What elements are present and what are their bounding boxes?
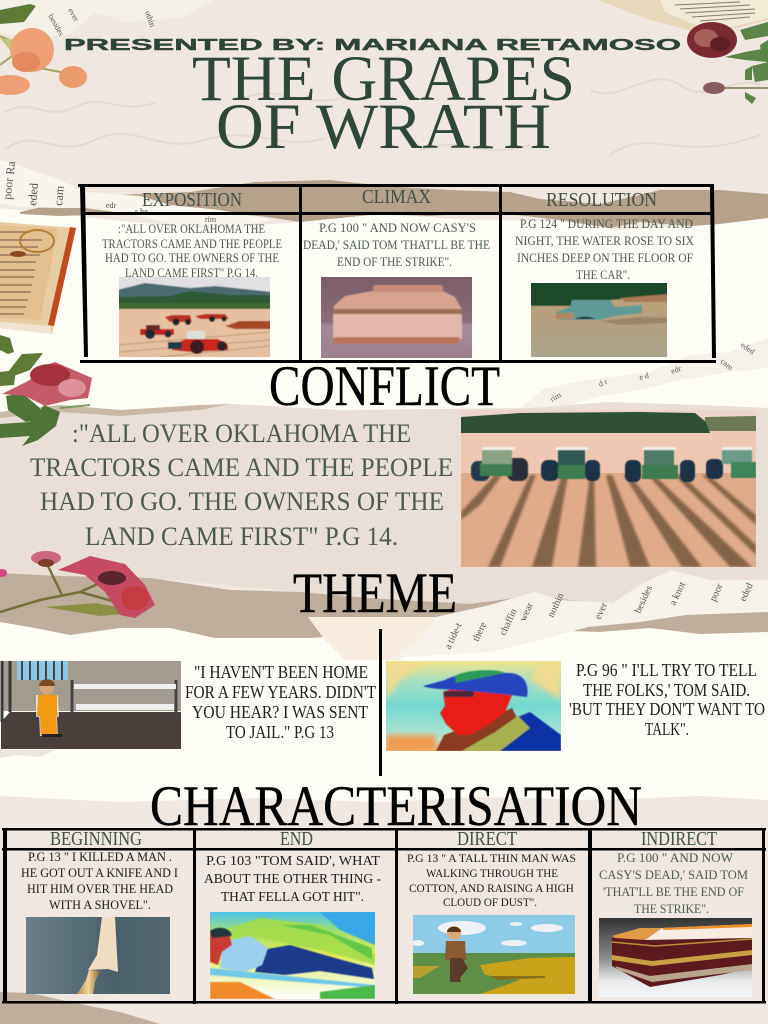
torn printed paper band: theme: ever [593,600,610,621]
image: tractors on farmland [117,275,272,359]
climax cell: END OF THE STRIKE". [337,255,452,269]
exposition cell: LAND CAME FIRST" P.G 14. [125,266,258,280]
torn printed paper band: theme: wear [518,600,536,623]
image: polished wooden casket [599,918,752,997]
torn printed paper band: right of conflict: eded [739,340,756,356]
torn printed paper band: theme: besides [633,584,655,615]
torn printed paper band: theme: a knot [668,580,688,607]
torn printed paper band: right of conflict: cam [719,357,735,373]
torn printed paper band: theme: there [471,620,489,643]
direct cell: COTTON, AND RAISING A HIGH [409,881,574,895]
end cell: P.G 103 "TOM SAID', WHAT [206,854,380,869]
climax cell: DEAD,' SAID TOM 'THAT'LL BE THE [303,238,490,252]
direct cell [407,828,576,994]
torn printed paper band: theme: eded [738,581,756,603]
title [192,43,575,163]
exposition cell: TRACTORS CAME AND THE PEOPLE [102,237,282,251]
torn printed paper band: theme: a tide-t [443,621,465,651]
title: THE GRAPES [192,43,575,115]
beginning cell: HE GOT OUT A KNIFE AND I [21,866,178,880]
image: cartoon man in field [412,915,575,994]
direct cell: P.G 13 " A TALL THIN MAN WAS [407,851,576,865]
table grid lines [78,184,716,363]
quote: folks [569,660,765,739]
exposition cell: EXPOSITION [142,189,242,211]
torn printed paper band: theme [392,570,768,658]
exposition cell [102,189,282,359]
beginning cell [21,828,178,994]
beginning cell: HIT HIM OVER THE HEAD [27,882,173,896]
conflict quote: :"ALL OVER OKLAHOMA THE [72,419,411,448]
direct cell: WALKING THROUGH THE [426,866,558,880]
rose: top right [687,22,768,104]
panel: characterisation table [2,828,766,1004]
brown scrap: bottom left [0,992,160,1024]
cream torn paper band: lower [0,620,768,802]
torn scrap: under jail image [0,750,55,758]
conflict quote [30,419,453,551]
image: painted portrait of Tom in a cap [386,661,561,751]
torn paper band: top left [0,0,215,37]
direct cell: DIRECT [457,828,517,850]
climax cell: CLIMAX [362,186,431,208]
indirect cell: 'THAT'LL BE THE END OF [603,884,744,899]
torn paper band: top left: othin [143,10,157,28]
divider: theme section [379,629,382,776]
beginning cell: P.G 13 " I KILLED A MAN . [28,850,172,864]
quote: jail: TO JAIL." P.G 13 [226,722,334,742]
torn printed paper band: upper left: poor [0,177,16,200]
torn printed paper band: upper left: eded [25,182,41,206]
torn printed paper band: upper left: edr [106,201,117,210]
torn printed paper band: upper left [0,160,272,226]
exposition cell: :"ALL OVER OKLAHOMA THE [118,222,265,236]
end cell: END [280,828,313,850]
torn printed paper band: right of conflict: e d [638,371,650,382]
quote: jail [185,662,376,742]
end cell: ABOUT THE OTHER THING - [204,872,381,887]
subtitle: presenter: PRESENTED BY: MARIANA RETAMOSO [64,37,681,54]
climax cell: P.G 100 " AND NOW CASY'S [319,221,476,235]
rose: left [0,335,92,446]
torn paper band: top left: besides [46,12,66,37]
torn printed paper band: theme: poor [708,581,726,603]
resolution cell [515,189,694,359]
image: copper casket [321,277,472,358]
torn printed paper band: theme: nothin [546,591,567,619]
indirect cell: CASY'S DEAD,' SAID TOM [599,867,748,882]
torn printed paper band: upper left: Ra [3,160,18,175]
quote: folks: TALK". [645,719,689,739]
flowers: top left [0,4,87,95]
title: OF WRATH [216,91,551,163]
indirect cell [599,828,752,997]
torn printed paper band: right of conflict: edr [670,364,683,376]
quote: jail: "I HAVEN'T BEEN HOME [194,662,368,682]
resolution cell: NIGHT, THE WATER ROSE TO SIX [515,234,694,248]
brown torn strip: lower [0,573,768,638]
exposition cell: HAD TO GO. THE OWNERS OF THE [105,251,279,265]
direct cell: CLOUD OF DUST". [443,895,537,909]
beginning cell: BEGINNING [50,828,142,850]
panel: plot table [78,184,716,363]
heading: conflict: CONFLICT [269,355,500,418]
image: painting of a man lying down [210,912,375,999]
image: knife [26,917,170,994]
torn printed paper band: upper left: s he [135,207,148,216]
resolution cell: INCHES DEEP ON THE FLOOR OF [517,251,693,265]
image: row of tractors in ploughed field [461,410,756,567]
resolution cell: P.G 124 " DURING THE DAY AND [520,217,693,231]
flower: above theme left [0,551,155,618]
beginning cell: WITH A SHOVEL". [49,898,151,912]
torn printed paper band: right of conflict [518,338,768,410]
image: cartoon prisoner in jail cell [1,661,181,749]
table grid lines [2,828,766,1004]
conflict quote: LAND CAME FIRST" P.G 14. [85,522,398,551]
torn paper band: top left: ever [66,6,81,23]
open book: top right [598,0,768,35]
beige paper band: conflict section [0,402,768,610]
image: truck in flood [529,281,669,359]
old book: left [0,222,76,334]
quote: jail: FOR A FEW YEARS. DIDN'T [185,682,376,702]
torn printed paper band: right of conflict: rim [548,390,563,404]
torn printed paper band: theme: chaffin [498,607,520,637]
brown torn strip: upper [20,180,768,228]
indirect cell: INDIRECT [641,828,717,850]
peach paper scrap [308,617,436,660]
quote: jail: YOU HEAR? I WAS SENT [192,702,368,722]
resolution cell: THE CAR". [576,268,630,282]
heading: theme: THEME [293,562,457,625]
torn printed paper band: right of conflict: d r [597,377,609,389]
resolution cell: RESOLUTION [546,189,657,211]
indirect cell: THE STRIKE". [634,901,709,916]
conflict quote: TRACTORS CAME AND THE PEOPLE [30,453,453,482]
climax cell [303,186,490,358]
indirect cell: P.G 100 " AND NOW [617,850,734,865]
end cell [204,828,381,999]
brown edge under the upper cream band [0,404,230,418]
end cell: THAT FELLA GOT HIT". [221,890,364,905]
conflict quote: HAD TO GO. THE OWNERS OF THE [40,487,444,516]
cream torn paper band: upper [0,208,768,412]
torn printed paper band: upper left: cam [51,184,67,206]
heading: characterisation: CHARACTERISATION [150,775,642,838]
torn printed paper band: upper left: rim [205,215,217,224]
